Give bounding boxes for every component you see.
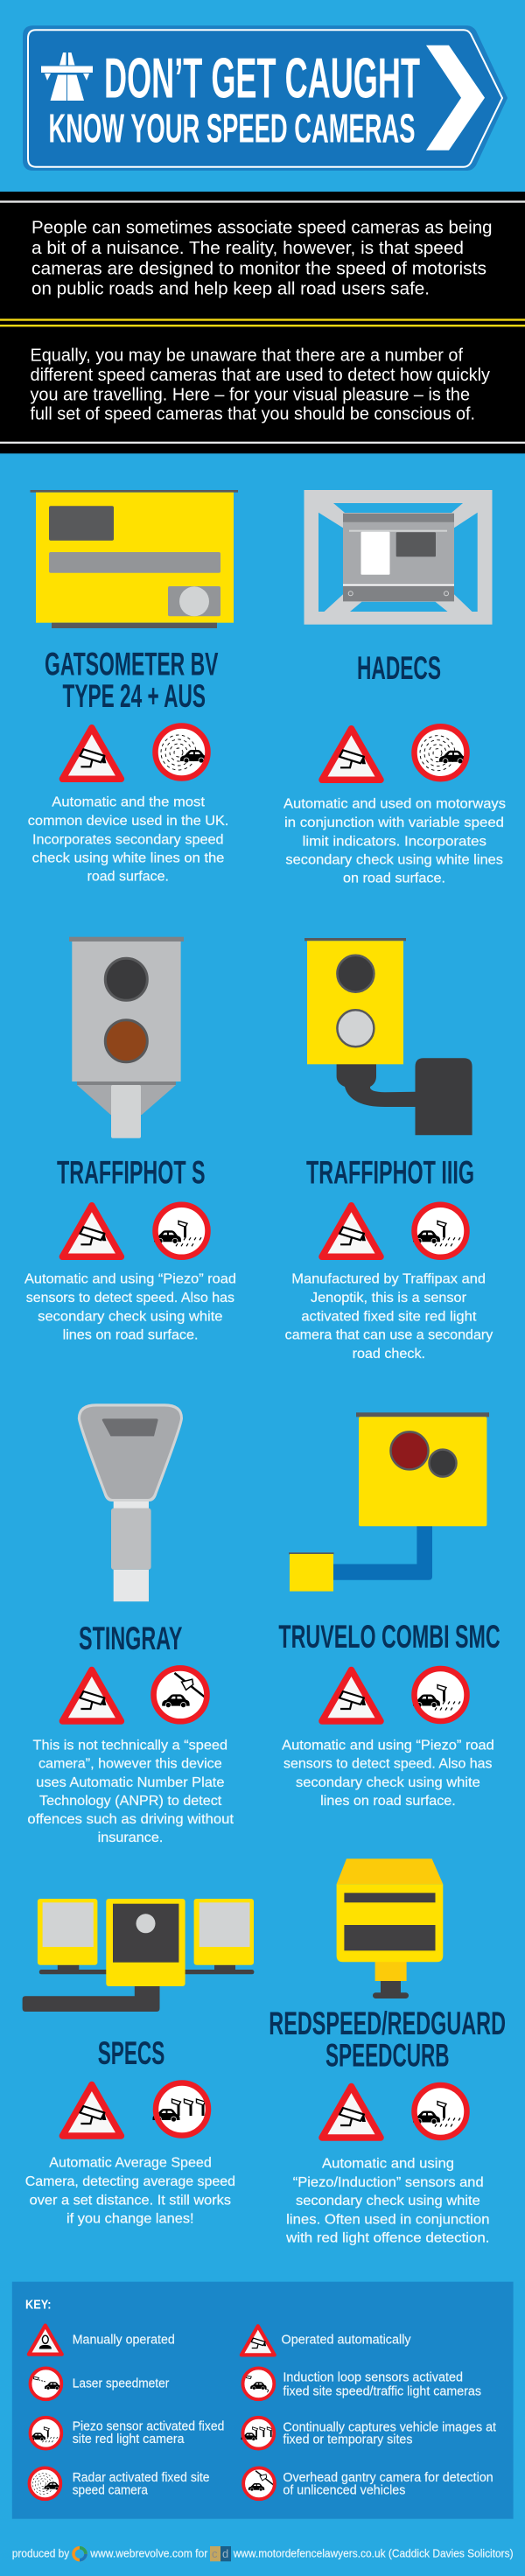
camera illustration: Gatsometer [30,490,238,628]
description: in conjunction with variable speed [284,816,504,830]
description: lines on road surface. [63,1328,198,1343]
icon: Caddick Davies logo [210,2546,231,2561]
description: “Piezo/Induction” sensors and [293,2175,484,2190]
intro band [0,192,525,453]
description: secondary check using white [296,1775,480,1790]
key item: operated automatically [242,2326,411,2355]
description: with red light offence detection. [285,2231,490,2246]
panel: Truvelo Combi SMC [278,1412,500,1809]
description: Automatic and used on motorways [284,797,506,812]
description [285,2157,490,2246]
title sign [23,25,508,171]
key item: induction loop: fixed site speed/traffic light cameras [283,2384,481,2398]
description: limit indicators. Incorporates [303,834,486,849]
intro paragraph 2 [30,346,491,424]
key heading: KEY: [25,2297,51,2312]
heading: TYPE 24 + AUS [63,678,206,714]
description [25,2156,235,2227]
intro paragraph 1: People can sometimes associate speed cameras as being [32,218,492,238]
icon: piezo circle [154,1205,208,1257]
description: lines. Often used in conjunction [286,2212,490,2227]
heading: SPECS [98,2035,164,2071]
description: sensors to detect speed. Also has [26,1291,234,1306]
camera illustration: Truvelo Combi SMC [289,1412,489,1592]
icon: automatic triangle [62,1670,121,1721]
intro paragraph 2: full set of speed cameras that you should be conscious of. [30,403,475,424]
icon: automatic triangle [322,729,381,780]
description: secondary check using white [296,2194,480,2208]
description: lines on road surface. [320,1794,456,1809]
description: over a set distance. It still works [30,2193,231,2208]
description: Jenoptik, this is a sensor [311,1291,467,1306]
footer credits: www.webrevolve.com for [89,2548,207,2560]
icon: automatic triangle [322,1670,381,1721]
intro paragraph 1: a bit of a nuisance. The reality, however, is that speed [32,238,464,258]
key item: overhead gantry [243,2468,494,2499]
description: road check. [353,1347,425,1362]
key item: manually operated: Manually operated [73,2333,175,2347]
description [24,1272,236,1343]
key item: laser speedmeter: Laser speedmeter [73,2376,169,2390]
icon: piezo circle [413,1669,467,1721]
key item: radar [29,2468,210,2499]
intro paragraph 1: cameras are designed to monitor the speed of motorists [32,258,486,278]
camera illustration: Stingray [78,1404,183,1601]
description: Automatic and the most [52,795,206,810]
heading [45,647,219,714]
description [27,1738,234,1845]
panel: SPECS [23,1899,254,2227]
description: check using white lines on the [32,851,224,866]
panel: HADECS [284,490,506,886]
description: common device used in the UK. [28,814,228,829]
intro paragraph 1: on public roads and help keep all road users safe. [32,279,430,299]
description: uses Automatic Number Plate [36,1775,225,1790]
panel: Traffiphot IIIG [285,938,493,1362]
description: Automatic and using [322,2157,454,2172]
intro paragraph 2: you are travelling. Here – for your visual pleasure – is the [30,384,470,404]
icon: Caddick Davies logo: d [222,2547,228,2560]
icon: radar circle [156,726,208,779]
description: Manufactured by Traffipax and [291,1272,486,1287]
icon: automatic triangle [322,1206,381,1256]
icon: piezo circle [413,2085,467,2138]
key item: overhead gantry: Overhead gantry camera for detection [283,2471,494,2485]
heading: TRAFFIPHOT S [57,1155,206,1191]
description [284,797,506,886]
description: Camera, detecting average speed [25,2174,235,2189]
description: on road surface. [343,872,445,886]
icon: automatic triangle [62,728,121,779]
description: Automatic Average Speed [49,2156,212,2171]
panel: Stingray [27,1404,234,1845]
key item: manually operated [29,2326,175,2355]
key item: overhead gantry: of unlicenced vehicles [283,2483,405,2497]
intro paragraph 2: Equally, you may be unaware that there are a number of [30,346,463,366]
intro paragraph 1 [32,218,492,299]
description: camera that can use a secondary [285,1328,493,1343]
description: offences such as driving without [27,1812,234,1827]
icon: multi-camera circle [152,2082,208,2135]
footer credits: produced by [12,2548,70,2560]
description [285,1272,493,1362]
heading: SPEEDCURB [326,2038,450,2074]
icon: gantry circle [154,1668,206,1721]
heading [269,2006,506,2074]
icon: motorway [41,52,93,101]
description: This is not technically a “speed [33,1738,228,1753]
description: sensors to detect speed. Also has [284,1756,492,1771]
description: activated fixed site red light [301,1309,477,1324]
key item: induction loop [242,2368,481,2399]
footer credits [12,2546,514,2561]
description: Incorporates secondary speed [32,832,224,847]
description: Technology (ANPR) to detect [39,1794,222,1809]
key item: continually captures: fixed or temporary sites [283,2432,413,2446]
description: Automatic and using “Piezo” road [282,1738,494,1753]
heading: HADECS [357,650,441,686]
camera illustration: Traffiphot IIIG [304,938,472,1135]
panel: key [12,2282,514,2519]
description: camera”, however this device [38,1756,222,1771]
panel: Redspeed/Redguard Speedcurb [269,1858,506,2246]
description: if you change lanes! [66,2212,194,2227]
description: road surface. [88,870,169,885]
camera illustration: HADECS [304,490,492,625]
intro paragraph 2: different speed cameras that are used to detect how quickly [30,365,491,385]
icon: automatic triangle [62,1206,121,1256]
key item: piezo sensor: Piezo sensor activated fixed [73,2420,224,2434]
icon: radar circle [415,726,467,779]
key item: continually captures [241,2418,496,2449]
icon: chevron arrow [426,46,485,150]
panel: Gatsometer BV [28,490,238,885]
camera illustration: SPECS [23,1899,254,2012]
key item: laser speedmeter [30,2368,169,2399]
key item: continually captures: Continually captures vehicle images at [283,2420,496,2434]
icon: webrevolve logo [74,2548,86,2560]
icon: Caddick Davies logo: c [212,2547,218,2560]
key item: radar: speed camera [73,2483,149,2497]
camera illustration: Redspeed [337,1858,443,1998]
camera illustration: Traffiphot S [69,937,184,1138]
icon: piezo circle [413,1205,467,1257]
footer credits: www.motordefencelawyers.co.uk (Caddick Davies Solicitors) [233,2548,514,2560]
description: secondary check using white lines [285,853,503,868]
key item: piezo sensor: site red light camera [73,2432,185,2446]
heading: STINGRAY [79,1620,183,1656]
key item: radar: Radar activated fixed site [73,2471,210,2485]
key item: piezo sensor [30,2418,224,2449]
icon: automatic triangle [322,2086,381,2138]
description: Automatic and using “Piezo” road [24,1272,236,1287]
icon: automatic triangle [62,2084,121,2136]
description: insurance. [98,1830,163,1845]
description [28,795,228,885]
panel: Traffiphot S [24,937,236,1343]
heading: GATSOMETER BV [45,647,219,682]
key item: induction loop: Induction loop sensors activated [283,2371,463,2385]
description: secondary check using white [38,1309,223,1324]
description [282,1738,494,1809]
key item: operated automatically: Operated automatically [282,2333,411,2347]
